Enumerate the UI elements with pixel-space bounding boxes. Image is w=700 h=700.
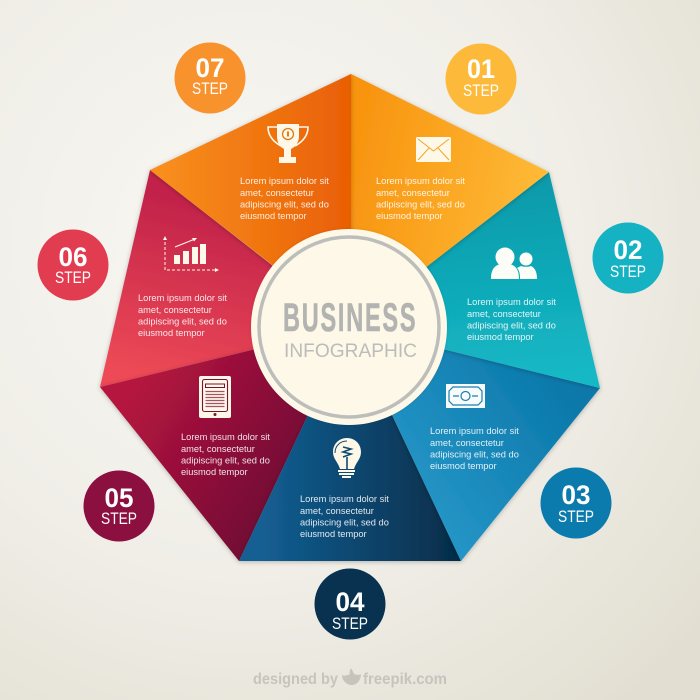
step 01 badge: STEP	[463, 81, 499, 100]
step 01 badge: 01	[467, 54, 495, 84]
text block 04: amet, consectetur	[300, 506, 374, 516]
text block 07: eiusmod tempor	[240, 211, 307, 221]
step 07 badge: STEP	[192, 79, 228, 98]
step 07 badge: 07	[196, 53, 224, 83]
heptagon wedges	[100, 74, 600, 561]
wedge 05 maroon	[100, 326, 350, 561]
step 05 badge	[84, 470, 154, 542]
step 02 badge: STEP	[610, 262, 646, 281]
text block 01: amet, consectetur	[376, 188, 450, 198]
wedge 04 navy	[239, 326, 461, 561]
wedge 02 teal	[350, 172, 600, 388]
footer credit: freepik.com	[363, 671, 447, 688]
icon: light bulb	[333, 438, 361, 478]
text block 02: eiusmod tempor	[467, 332, 534, 342]
text block 04: Lorem ipsum dolor sit	[300, 494, 389, 504]
text block 05: amet, consectetur	[181, 444, 255, 454]
text block 03: Lorem ipsum dolor sit	[430, 426, 519, 436]
text block 01: eiusmod tempor	[376, 211, 443, 221]
center subtitle: INFOGRAPHIC	[284, 340, 417, 362]
text block 06	[138, 293, 227, 338]
text block 04	[300, 494, 389, 539]
text block 04: adipiscing elit, sed do	[300, 518, 389, 528]
step 04 badge	[314, 568, 386, 640]
icon: tablet	[199, 376, 231, 418]
text block 07: adipiscing elit, sed do	[240, 200, 329, 210]
text block 07: amet, consectetur	[240, 188, 314, 198]
text block 06: eiusmod tempor	[138, 328, 205, 338]
icon: freepik logo	[342, 668, 361, 685]
step 05 badge: STEP	[101, 509, 137, 528]
icon: trophy	[268, 124, 308, 163]
wedge 01 orange	[350, 74, 549, 326]
text block 05	[181, 432, 270, 477]
icon: people	[491, 248, 537, 279]
step 04 badge: STEP	[332, 614, 368, 633]
text block 02: amet, consectetur	[467, 309, 541, 319]
icon: banknote	[446, 384, 485, 408]
text block 03: eiusmod tempor	[430, 461, 497, 471]
text block 02: Lorem ipsum dolor sit	[467, 297, 556, 307]
step 04 badge: 04	[336, 587, 364, 617]
step 05 badge: 05	[104, 483, 134, 513]
step 02 badge: 02	[614, 235, 642, 265]
text block 07	[240, 176, 329, 221]
text block 03: amet, consectetur	[430, 438, 504, 448]
text block 06: adipiscing elit, sed do	[138, 316, 227, 326]
text block 05: Lorem ipsum dolor sit	[181, 432, 270, 442]
text block 03	[430, 426, 519, 471]
text block 04: eiusmod tempor	[300, 529, 367, 539]
center title: BUSINESS	[283, 294, 417, 340]
step 06 badge: STEP	[55, 268, 91, 287]
wedge 06 red	[100, 170, 350, 387]
text block 05: adipiscing elit, sed do	[181, 456, 270, 466]
text block 01	[376, 176, 465, 221]
step 01 badge	[446, 44, 516, 114]
text block 07: Lorem ipsum dolor sit	[240, 176, 329, 186]
icon: envelope	[416, 137, 451, 162]
text block 06: amet, consectetur	[138, 305, 212, 315]
text block 01: Lorem ipsum dolor sit	[376, 176, 465, 186]
footer credit	[253, 668, 447, 688]
step 07 badge	[174, 42, 246, 114]
icon: bar chart	[163, 236, 219, 272]
step 02 badge	[592, 222, 664, 294]
text block 02: adipiscing elit, sed do	[467, 320, 556, 330]
footer credit: designed by	[253, 671, 338, 688]
wedge 07 dark orange	[150, 74, 351, 326]
step 03 badge: 03	[562, 480, 590, 510]
step 06 badge	[38, 230, 108, 300]
text block 06: Lorem ipsum dolor sit	[138, 293, 227, 303]
text block 02	[467, 297, 556, 342]
text block 01: adipiscing elit, sed do	[376, 200, 465, 210]
text block 03: adipiscing elit, sed do	[430, 450, 519, 460]
step 06 badge: 06	[58, 242, 88, 272]
text block 05: eiusmod tempor	[181, 467, 248, 477]
step 03 badge: STEP	[558, 507, 594, 526]
center circle	[251, 229, 447, 425]
wedge 03 blue	[350, 326, 600, 561]
step 03 badge	[540, 468, 612, 538]
